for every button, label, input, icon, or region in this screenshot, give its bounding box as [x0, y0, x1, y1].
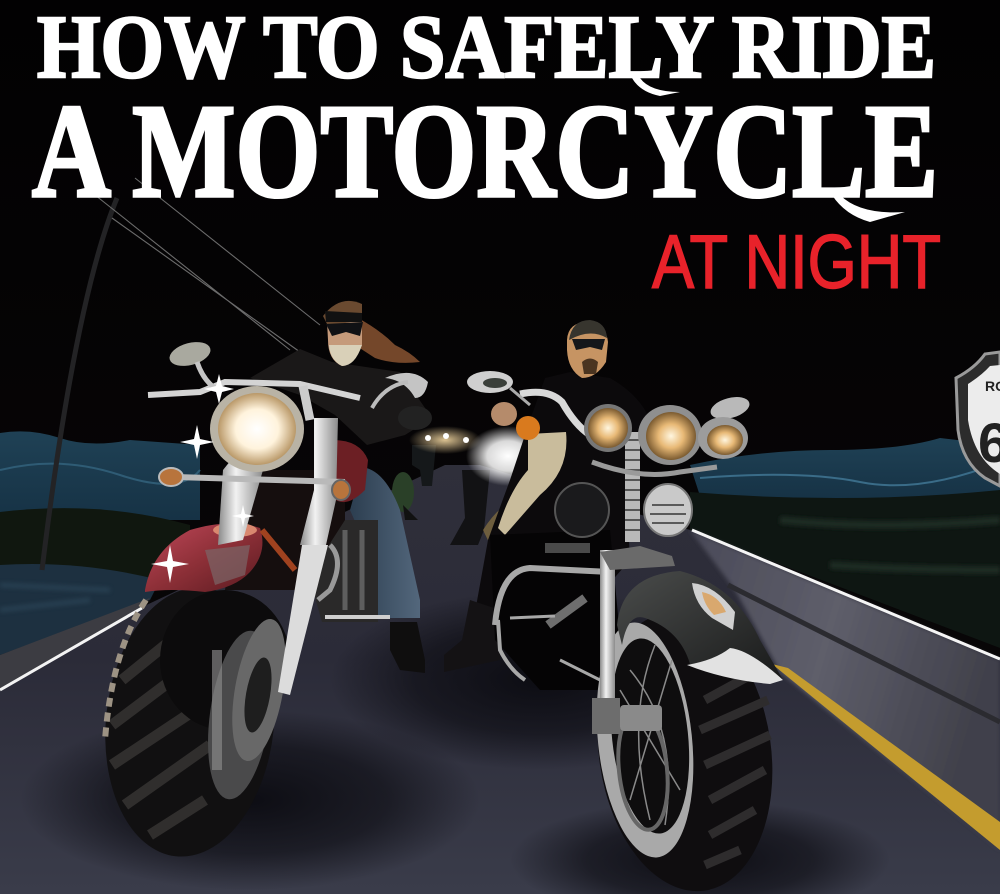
fork: [600, 550, 615, 700]
right mirror: [372, 373, 428, 408]
fender: [617, 571, 783, 680]
left landscape: [0, 431, 200, 655]
left indicator: [159, 468, 183, 486]
route 66 sign: [956, 352, 1000, 486]
tank: [332, 440, 368, 502]
left shoulder: [0, 598, 150, 690]
leg and boot: [444, 600, 500, 672]
tire tread: [700, 670, 770, 865]
distant riders and lights: [392, 426, 550, 555]
road: [0, 465, 1000, 894]
handlebar: [148, 382, 360, 398]
engine block: [490, 530, 625, 690]
tire: [580, 601, 790, 894]
utility pole and wires: [42, 178, 320, 570]
upper fork left: [218, 435, 263, 545]
forearm: [498, 432, 566, 535]
bar riser: [303, 386, 310, 420]
road shadows: [20, 590, 890, 894]
left mirror: [467, 371, 530, 405]
torso: [470, 372, 650, 640]
fork yoke: [600, 546, 675, 570]
headlight: [218, 393, 296, 465]
horn: [644, 484, 692, 536]
dark frame: [225, 470, 345, 590]
left mirror: [167, 338, 222, 392]
right mirror: [708, 393, 752, 423]
copper bracket: [262, 530, 295, 570]
lit road surface on the right: [690, 530, 1000, 850]
right indicator: [332, 480, 350, 500]
wheel hub: [198, 615, 295, 803]
headlight housing back: [555, 483, 609, 537]
hand: [491, 402, 517, 426]
handlebar: [520, 392, 590, 435]
spring column: [625, 432, 640, 542]
yellow centre line: [772, 664, 1000, 850]
whitewall: [586, 618, 704, 862]
right landscape: [690, 438, 1000, 648]
fender ornament: [692, 583, 735, 630]
lower bar: [592, 462, 717, 474]
head: [323, 301, 363, 366]
axle block: [592, 698, 620, 734]
tire: [92, 579, 288, 865]
left rider: [250, 301, 432, 673]
road edge line left: [0, 608, 142, 690]
subtitle: AT NIGHT: [652, 220, 941, 305]
headlight right: [698, 417, 748, 459]
lower fork: [278, 545, 328, 695]
hair: [355, 318, 420, 363]
indicator bar: [175, 477, 345, 482]
engine chrome details: [495, 548, 610, 680]
engine chrome: [318, 530, 390, 617]
headlight small: [584, 404, 632, 452]
wheel interior: [602, 635, 698, 837]
boot: [390, 622, 425, 673]
headlight rim: [210, 386, 304, 472]
left bike: [92, 338, 428, 865]
right bike: [467, 371, 790, 894]
fender shine: [213, 523, 257, 537]
head: [567, 320, 608, 378]
right rider: [444, 320, 650, 672]
amber indicator: [516, 416, 540, 440]
jacket: [250, 349, 432, 445]
wheel shadow: [160, 590, 290, 730]
tire tread: [112, 625, 210, 835]
glove: [398, 406, 432, 430]
spokes: [613, 645, 680, 832]
fender grey reflection: [205, 545, 250, 585]
jeans: [350, 467, 420, 618]
sparkles: [151, 374, 254, 583]
headlight centre: [638, 405, 702, 465]
title: [32, 0, 938, 225]
fender tip: [687, 648, 783, 684]
road edge line right: [692, 530, 1000, 659]
fender: [145, 523, 262, 592]
title swashes: [632, 78, 905, 222]
upper fork right: [300, 418, 338, 545]
centre seam: [728, 585, 1000, 722]
brake hub: [620, 705, 662, 731]
tire sidewall highlight: [105, 600, 146, 740]
engine: [310, 520, 378, 622]
